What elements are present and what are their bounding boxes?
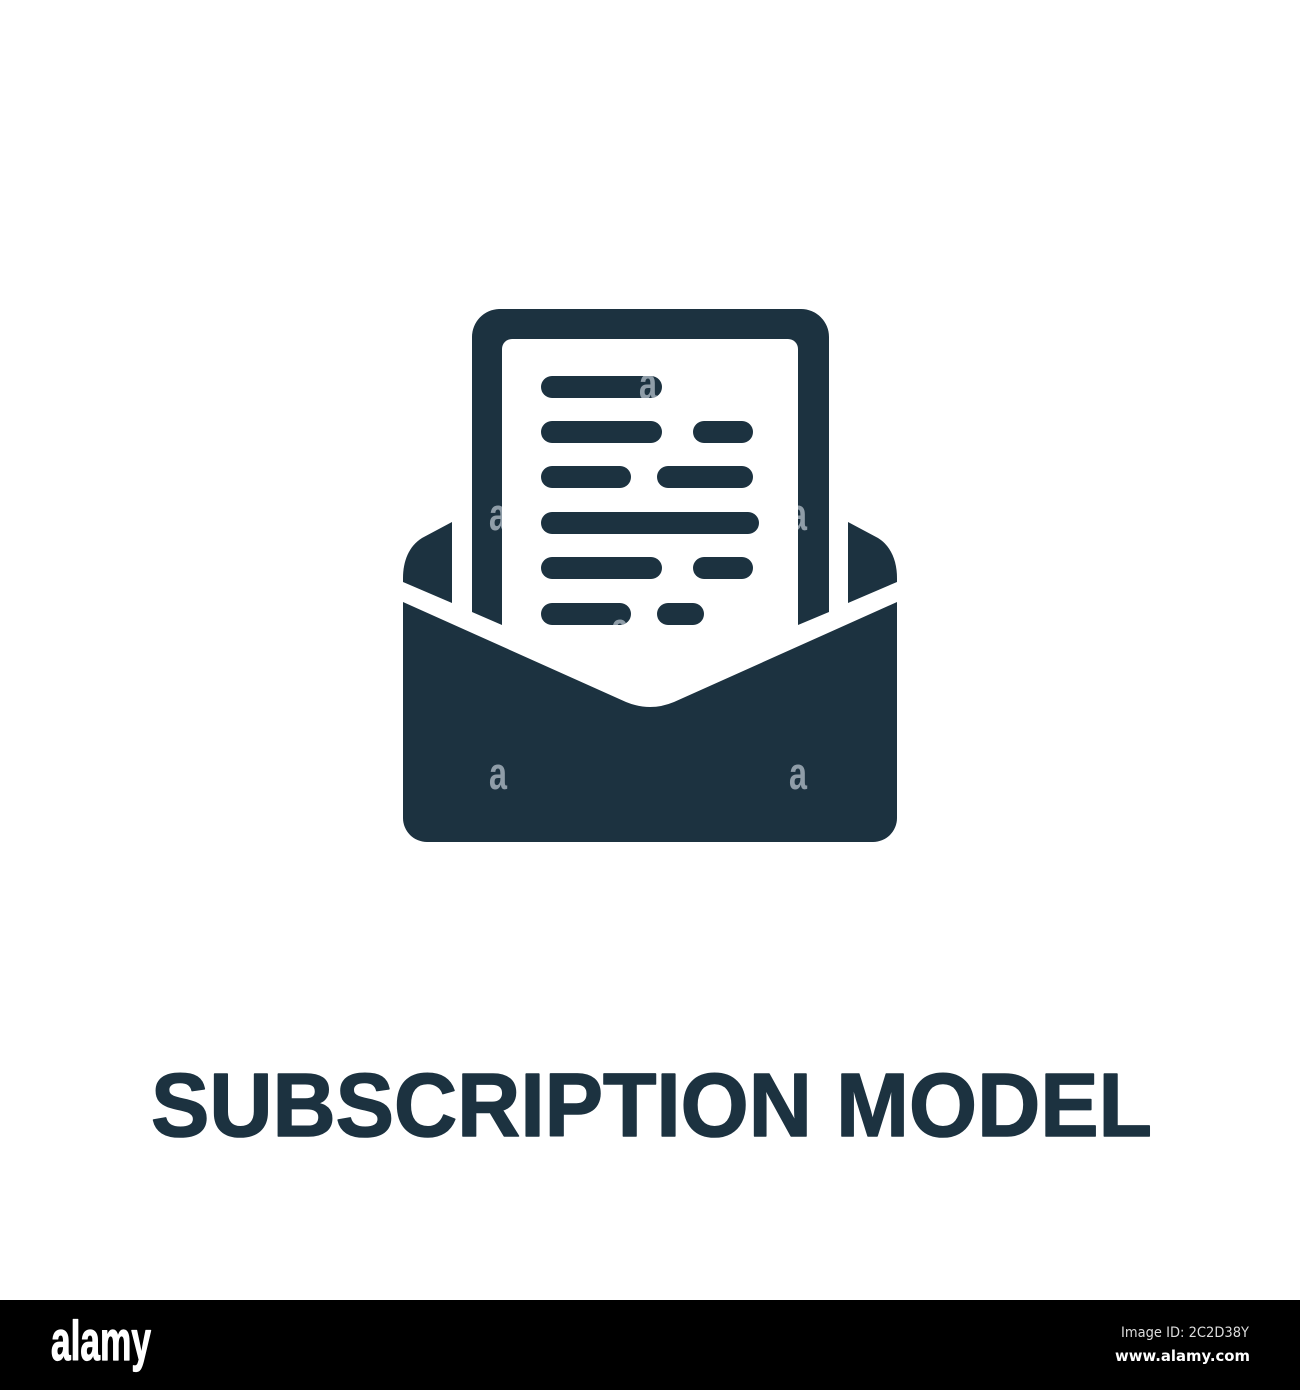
footer bar: [0, 1300, 1300, 1390]
icon: envelope front: [403, 602, 897, 842]
icon: open envelope with document: [403, 309, 897, 842]
watermark letters: a: [639, 360, 658, 409]
infographic canvas: [0, 309, 1300, 1390]
website: www.alamy.com: [1115, 1347, 1250, 1365]
watermark letters: a: [789, 491, 808, 540]
icon: envelope back flap right: [848, 522, 897, 603]
image id: Image ID: 2C2D38Y: [1121, 1325, 1249, 1341]
watermark letters: [489, 360, 808, 799]
icon: document frame: [472, 309, 829, 625]
icon: document text lines: [541, 376, 759, 625]
title: SUBSCRIPTION MODEL: [151, 1056, 1152, 1156]
watermark letters: a: [611, 605, 630, 654]
footer logo: alamy: [51, 1309, 151, 1372]
watermark letters: a: [489, 491, 508, 540]
icon: envelope back flap left: [403, 522, 452, 603]
watermark letters: a: [489, 750, 508, 799]
watermark letters: a: [789, 750, 808, 799]
